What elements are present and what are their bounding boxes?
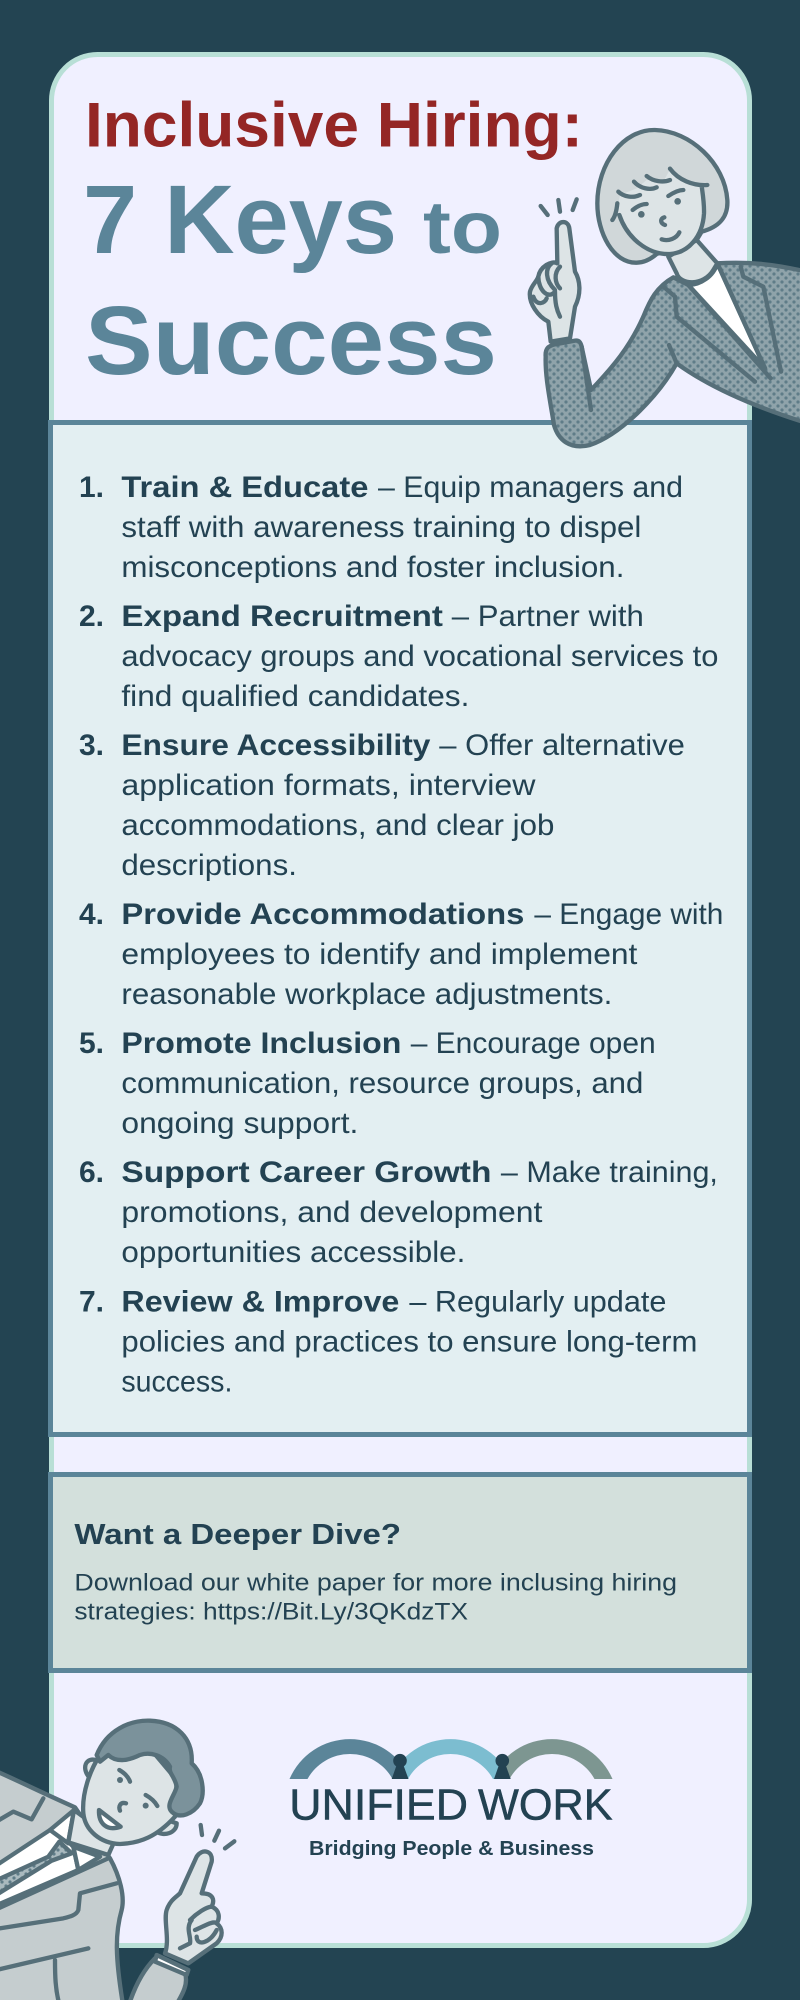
item 5: – Encourage open	[411, 1027, 656, 1060]
call to action body: strategies: https://Bit.Ly/3QKdzTX	[74, 1598, 468, 1626]
list panel background	[50, 422, 750, 1434]
man neck	[68, 1810, 115, 1855]
item 2: advocacy groups and vocational services to	[121, 640, 718, 673]
item 5: Promote Inclusion	[121, 1027, 401, 1060]
woman face	[617, 169, 704, 254]
logo: Unified Work	[289, 1739, 613, 1860]
man suit lines	[0, 1798, 117, 2000]
man suit	[0, 1770, 123, 2000]
item 7: – Regularly update	[409, 1286, 666, 1318]
item 6: 6.	[79, 1156, 104, 1189]
panel: call to action	[50, 1474, 750, 1670]
item 6	[79, 1156, 718, 1269]
item 3: accommodations, and clear job	[121, 809, 554, 842]
logo tagline: Bridging People & Business	[309, 1838, 594, 1860]
man right collar	[73, 1847, 100, 1870]
panel: seven keys list	[50, 422, 750, 1434]
item 4: reasonable workplace adjustments.	[121, 978, 612, 1011]
item 2	[79, 600, 718, 713]
illustration: man pointing	[0, 1721, 234, 2000]
man mouth	[99, 1810, 121, 1828]
item 2: Expand Recruitment	[121, 600, 443, 633]
item 5	[79, 1027, 656, 1140]
item 5: communication, resource groups, and	[121, 1067, 643, 1100]
call to action background	[50, 1474, 750, 1670]
woman neck	[668, 240, 717, 282]
logo wordmark	[289, 1780, 613, 1829]
item 3: 3.	[79, 729, 104, 762]
man eyes	[117, 1777, 149, 1809]
woman eyes	[638, 198, 681, 218]
item 1	[79, 471, 683, 584]
woman suit	[546, 263, 800, 446]
title line: Inclusive Hiring: Inclusive Hiring:	[85, 90, 583, 160]
item 1: – Equip managers and	[378, 471, 683, 504]
logo arch: blue	[290, 1739, 396, 1779]
man face	[83, 1748, 177, 1844]
man finger lines	[180, 1907, 217, 1948]
item 4	[79, 898, 723, 1011]
logo wordmark: UNIFIED	[289, 1780, 468, 1829]
woman spark marks	[541, 199, 577, 215]
item 1: Train & Educate	[121, 471, 368, 504]
item 4: employees to identify and implement	[121, 938, 638, 971]
item 2: – Partner with	[452, 600, 644, 633]
man shirt	[0, 1810, 78, 1907]
item 3: descriptions.	[121, 849, 297, 882]
item 5: ongoing support.	[121, 1107, 358, 1140]
man sleeve	[128, 1958, 186, 2000]
item 6: promotions, and development	[121, 1196, 543, 1229]
item 1: 1.	[79, 471, 104, 504]
woman hair	[597, 130, 727, 263]
illustration: woman pointing	[530, 130, 800, 446]
item 6: – Make training,	[501, 1156, 718, 1189]
woman face lines	[612, 169, 707, 254]
man ear left	[85, 1760, 98, 1780]
woman finger lines	[533, 263, 560, 317]
item 3	[79, 729, 685, 882]
logo arch: grey green	[506, 1739, 612, 1779]
item 4: 4.	[79, 898, 104, 931]
logo keyhole figures	[392, 1754, 511, 1779]
item 7: success.	[121, 1366, 232, 1398]
man spark marks	[201, 1825, 234, 1848]
item 7: Review & Improve	[121, 1286, 399, 1318]
man hand	[165, 1851, 222, 1963]
woman hand	[530, 222, 579, 342]
item 5: 5.	[79, 1027, 104, 1060]
call to action body	[74, 1570, 677, 1626]
item 2: 2.	[79, 600, 104, 633]
logo wordmark: WORK	[478, 1780, 613, 1829]
title	[83, 90, 583, 395]
item 2: find qualified candidates.	[121, 680, 469, 713]
man hair	[97, 1721, 203, 1815]
man brows and nose	[119, 1770, 157, 1811]
item 4: – Engage with	[534, 898, 723, 931]
item 6: Support Career Growth	[121, 1156, 491, 1189]
item 1: misconceptions and foster inclusion.	[121, 551, 624, 584]
item 7: policies and practices to ensure long-term	[121, 1326, 697, 1358]
call to action heading: Want a Deeper Dive?	[74, 1519, 401, 1551]
man collar line	[50, 1830, 68, 1843]
item 1: staff with awareness training to dispel	[121, 511, 641, 544]
item 3: application formats, interview	[121, 769, 536, 802]
item 6: opportunities accessible.	[121, 1236, 465, 1269]
item 3: – Offer alternative	[439, 729, 685, 762]
man shirt cuff	[155, 1955, 188, 1975]
man tie	[0, 1842, 72, 1897]
item 3: Ensure Accessibility	[121, 729, 431, 762]
title word: to: to	[423, 186, 502, 269]
item 4: Provide Accommodations	[121, 898, 524, 931]
man ear right	[157, 1820, 177, 1834]
woman suit lines	[582, 263, 781, 410]
call to action body: Download our white paper for more inclusing hiring	[74, 1570, 677, 1596]
logo arch: light blue	[404, 1739, 498, 1779]
item 7: 7.	[79, 1286, 104, 1318]
item 7	[79, 1286, 697, 1398]
title line: 7 Keys: 7 Keys	[83, 165, 397, 274]
woman shirt	[688, 263, 765, 368]
title line: Success: Success	[85, 286, 497, 395]
